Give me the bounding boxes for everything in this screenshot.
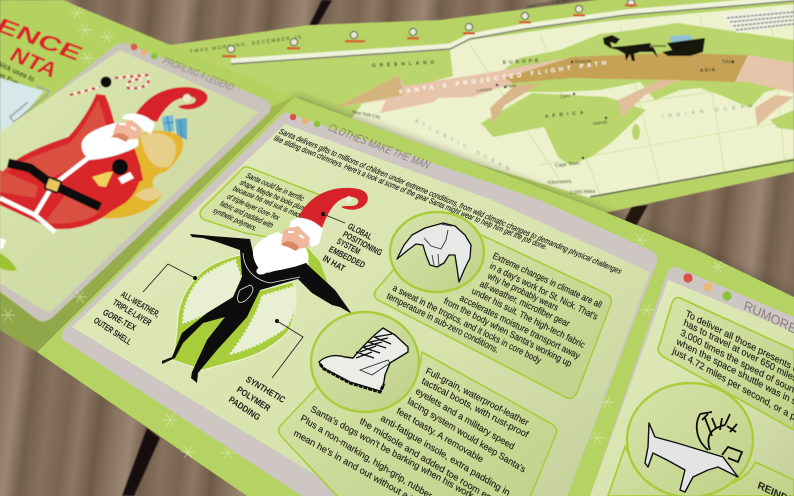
- callout: suit description: synthetic polymers.: [211, 207, 259, 233]
- callout: suit description: shape. Maybe he looks plump: [238, 179, 311, 214]
- clock labels: [222, 4, 637, 58]
- boot body: [319, 328, 408, 391]
- callout: reindeer facts: [608, 447, 794, 496]
- padding left: [183, 260, 241, 323]
- label: padding: SYNTHETIC: [244, 374, 288, 405]
- callout: microfiber gear: under his suit. The high-tech fabric: [470, 286, 587, 350]
- panel frame: [0, 43, 271, 321]
- callout: suit description: fabric and padded with: [218, 200, 275, 230]
- map label asia: ASIA: [700, 67, 716, 74]
- map label africa: AFRICA: [545, 110, 584, 120]
- belt: [8, 163, 100, 207]
- panel body: [590, 280, 794, 496]
- leader dot: padding: [275, 319, 279, 323]
- green wing behind arm: [306, 246, 331, 292]
- green padding backdrop: [172, 255, 296, 370]
- map ocean area: [200, 4, 794, 198]
- boot sole: [320, 364, 384, 392]
- padding right: [230, 286, 296, 354]
- santa illustration: [0, 75, 208, 271]
- panel frame: [62, 113, 657, 496]
- blue notepad: [0, 78, 44, 137]
- callout: suit description: because his red suit is made: [231, 185, 306, 220]
- callout: suit description: of triple-layer Gore-Tex: [225, 193, 282, 222]
- map cities: Tokyo: [722, 59, 734, 64]
- hat ball: [346, 196, 352, 202]
- boot tip: [0, 238, 6, 250]
- mustache: [111, 133, 129, 142]
- map label indian: INDIAN OCEAN: [662, 103, 753, 120]
- timeline rail top: [231, 0, 794, 61]
- callout: microfiber gear: accelerates moisture transport away: [458, 293, 582, 361]
- label: gps: POSITIONING: [341, 229, 384, 258]
- land: africa: [481, 93, 646, 165]
- label: outer shell: ALL-WEATHER,: [119, 289, 162, 319]
- circle: boot: [311, 312, 419, 412]
- callout: tactical boots: Full-grain, waterproof-leather: [424, 366, 530, 428]
- map grid: [460, 8, 794, 195]
- callout: speed facts: [658, 298, 794, 430]
- callout: tactical boots: tactical boots, with rust-proof: [420, 376, 530, 440]
- callout: tactical boots: lacing system would keep Santa's: [406, 396, 527, 475]
- label: padding: [227, 374, 288, 422]
- coat: [0, 94, 141, 229]
- window dots: [131, 44, 157, 59]
- hat brim: [289, 218, 323, 247]
- scale bar text: Kilometers: [548, 179, 572, 186]
- intro text line two: like sliding down chimneys. Here's a look at some of the gear Santa might wear to help him get the job done.: [272, 134, 550, 251]
- sleeve and glove: [117, 165, 143, 190]
- beard: [253, 232, 309, 272]
- leader dot: gps: [321, 212, 325, 216]
- yellow bag tie: [92, 172, 113, 187]
- panel frame: [590, 267, 794, 496]
- raised glove: [100, 76, 112, 88]
- shadow on map: [294, 94, 794, 304]
- callout: tactical boots: [279, 352, 556, 496]
- panel: clothes make the man: [62, 113, 657, 496]
- window dots: [683, 273, 732, 301]
- land: madagascar: [632, 124, 640, 140]
- circle: microfiber shirt: [390, 212, 484, 292]
- timeline rail line: [231, 1, 794, 64]
- callout: microfiber gear: from the body when Santa's working up: [442, 296, 573, 369]
- panel: rumored: [590, 267, 794, 496]
- boot laces: [356, 334, 392, 358]
- label: outer shell: OUTER SHELL: [92, 315, 134, 347]
- left sheet: [0, 0, 294, 352]
- label: outer shell: GORE-TEX: [101, 307, 138, 333]
- cuff: [118, 172, 134, 184]
- label: outer shell: TRIPLE-LAYER: [111, 297, 154, 328]
- flight path label: SANTA'S PROJECTED FLIGHT PATH: [399, 61, 607, 96]
- mustache: [281, 241, 299, 251]
- map legend note: [720, 8, 794, 33]
- land: eurasia: [495, 23, 794, 108]
- land: north america and greenland: [200, 50, 453, 128]
- label: outer shell: [92, 289, 162, 347]
- white trim: [0, 155, 92, 232]
- label: padding: PADDING: [227, 394, 262, 422]
- map cities: [352, 58, 734, 169]
- map cities: Paris: [506, 83, 517, 89]
- label: gps: IN HAT: [321, 253, 347, 274]
- eyebrows: [119, 124, 136, 130]
- panel body: [72, 124, 650, 496]
- map cities: London: [477, 86, 493, 93]
- santa in black suit: [162, 188, 368, 383]
- callout: tactical boots: anti-fatigue insole, extra padding in: [379, 413, 512, 496]
- suit seams: [238, 253, 300, 302]
- map cities: Cape Town: [555, 161, 580, 169]
- leader dot: outer shell: [193, 276, 197, 280]
- label: padding: POLYMER: [235, 384, 273, 413]
- green ground blob: [0, 253, 17, 271]
- sack highlight: [135, 133, 176, 201]
- clock markers: [227, 0, 635, 53]
- map label europe: EUROPE: [503, 58, 539, 66]
- callout: microfiber gear: why he probably wears: [485, 271, 560, 313]
- callout: microfiber gear: a sweat in the tropics, and it locks in core body: [391, 283, 543, 366]
- callout: suit description: [200, 167, 325, 240]
- coat highlights: [0, 100, 112, 224]
- hat: [299, 188, 368, 228]
- callout: microfiber gear: all-weather, microfiber gear: [478, 279, 571, 329]
- window dots: [290, 114, 320, 127]
- panel heading: CLOTHES MAKE THE MAN: [325, 123, 432, 171]
- gift boxes: [162, 115, 187, 140]
- scale rail: [590, 160, 794, 197]
- callout: tactical boots: eyelets and a military speed: [414, 386, 516, 452]
- face: [281, 226, 310, 250]
- panel body: [0, 50, 259, 312]
- beard: [82, 123, 138, 160]
- belt buckle: [44, 177, 62, 193]
- leader line: gps: [323, 214, 345, 223]
- intro text: Santa delivers gifts to millions of children under extreme conditions, from wild climatic changes to demanding physical challenges: [277, 127, 624, 276]
- boot flap: [360, 360, 390, 375]
- map cities: New York City: [352, 109, 381, 120]
- fold shadow band: [0, 97, 294, 352]
- hat: [135, 87, 208, 122]
- label: gps: GLOBAL: [346, 221, 374, 242]
- map cities: Moscow: [575, 58, 592, 64]
- snowflakes on sheet: [1, 234, 725, 459]
- map label atlantic: ATLANTIC OCEAN: [415, 118, 510, 173]
- sack: [98, 131, 183, 219]
- face: [113, 120, 142, 140]
- map label greenland: GREENLAND: [372, 60, 435, 69]
- flight path arrow: [337, 53, 794, 126]
- panel: profiling a legend: [0, 43, 271, 321]
- callout: microfiber gear: in a day's work for St. Nick. That's: [488, 261, 600, 322]
- hat brim: [122, 113, 155, 134]
- label: gps: EMBEDDED: [327, 244, 368, 270]
- beard curl: [256, 268, 272, 275]
- map sheet: [150, 0, 794, 214]
- map cities: Cairo: [560, 93, 571, 99]
- label: gps: SYSTEM: [335, 236, 362, 256]
- scale bar miles: 2,000 Miles: [570, 189, 596, 196]
- label: gps: [321, 221, 384, 274]
- leader line: padding: [272, 321, 303, 378]
- leader line: outer shell: [143, 264, 195, 292]
- callout: tactical boots: feet toasty. A removable: [395, 406, 485, 465]
- callout: microfiber gear: Extreme changes in climate are all: [491, 251, 603, 310]
- circle: reindeer: [627, 383, 753, 496]
- callout: microfiber gear: [374, 232, 612, 398]
- paper clip: [10, 86, 49, 122]
- candy cane: [70, 75, 149, 95]
- panel heading: PROFILING A LEGEND: [160, 56, 236, 93]
- callout: microfiber gear: temperature in sub-zero conditions.: [385, 291, 500, 355]
- snowflakes on cover: [70, 7, 114, 64]
- timeline heading: TMAS MORNING, DECEMBER 25: [190, 34, 302, 55]
- eyebrows: [288, 232, 304, 238]
- reindeer and sleigh silhouette: [603, 35, 705, 61]
- land: australia: [770, 110, 794, 130]
- title line two: NTA: [5, 44, 62, 82]
- map cities: Nairobi: [593, 120, 607, 126]
- callout: suit description: Santa could be in terrific: [244, 172, 306, 203]
- black suit: [162, 234, 352, 383]
